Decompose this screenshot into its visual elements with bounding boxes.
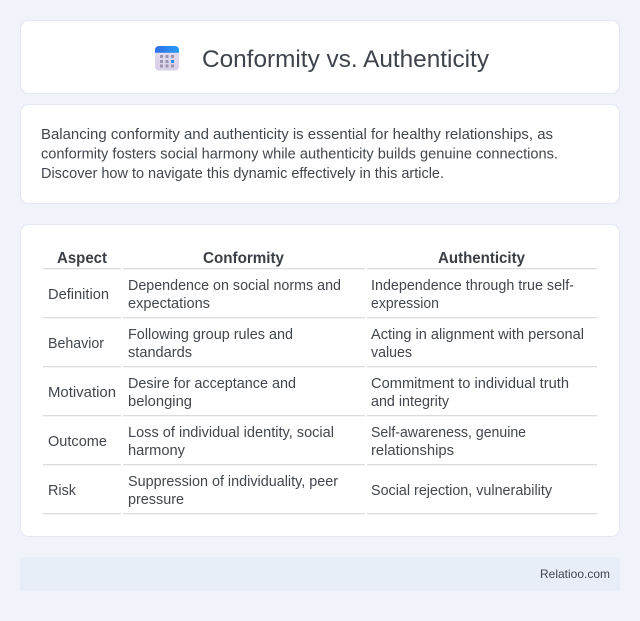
row: outcome xyxy=(48,425,526,459)
row: behavior: Acting in alignment with personal xyxy=(371,327,584,343)
row: risk: Suppression of individuality, peer xyxy=(128,474,338,490)
table header row: Aspect xyxy=(57,250,108,267)
row: behavior: values xyxy=(371,345,412,361)
footer brand text: Relatioo.com xyxy=(540,567,610,581)
row: motivation: belonging xyxy=(128,394,192,410)
row: outcome: harmony xyxy=(128,443,186,459)
row: risk xyxy=(48,474,553,508)
row: behavior: standards xyxy=(128,345,192,361)
intro text: conformity fosters social harmony while authenticity builds genuine connections. xyxy=(41,146,558,162)
intro text: Balancing conformity and authenticity is essential for healthy relationships, as xyxy=(41,127,553,143)
row: risk: Social rejection, vulnerability xyxy=(371,483,553,499)
table header row: Authenticity xyxy=(438,250,525,267)
row: motivation: Desire for acceptance and xyxy=(128,376,296,392)
header panel xyxy=(20,20,620,94)
row: outcome: Outcome xyxy=(48,434,107,450)
row: definition: Dependence on social norms and xyxy=(128,278,341,294)
panel: introduction xyxy=(20,104,620,204)
intro text xyxy=(41,127,558,182)
row: definition: expectations xyxy=(128,296,210,312)
row: motivation: Commitment to individual truth xyxy=(371,376,569,392)
row: behavior xyxy=(48,327,584,361)
row: behavior: Following group rules and xyxy=(128,327,293,343)
row: outcome: Loss of individual identity, social xyxy=(128,425,334,441)
row: motivation: Motivation xyxy=(48,385,116,401)
intro text: Discover how to navigate this dynamic effectively in this article. xyxy=(41,166,444,182)
title: Conformity vs. Authenticity xyxy=(202,46,489,73)
row: outcome: Self-awareness, genuine xyxy=(371,425,526,441)
row: motivation: and integrity xyxy=(371,394,450,410)
table header row xyxy=(57,250,525,267)
row: outcome: relationships xyxy=(371,443,454,459)
icon: calendar xyxy=(155,46,179,70)
panel: comparison table xyxy=(20,224,620,536)
row: risk: pressure xyxy=(128,492,184,508)
table header row: Conformity xyxy=(203,250,284,267)
row: definition: expression xyxy=(371,296,439,312)
row: motivation xyxy=(48,376,569,410)
row: behavior: Behavior xyxy=(48,336,104,352)
row: definition: Definition xyxy=(48,287,109,303)
footer bar xyxy=(20,557,620,591)
row: definition xyxy=(48,278,574,312)
table grid lines xyxy=(43,268,597,514)
row: definition: Independence through true self- xyxy=(371,278,574,294)
row: risk: Risk xyxy=(48,483,77,499)
